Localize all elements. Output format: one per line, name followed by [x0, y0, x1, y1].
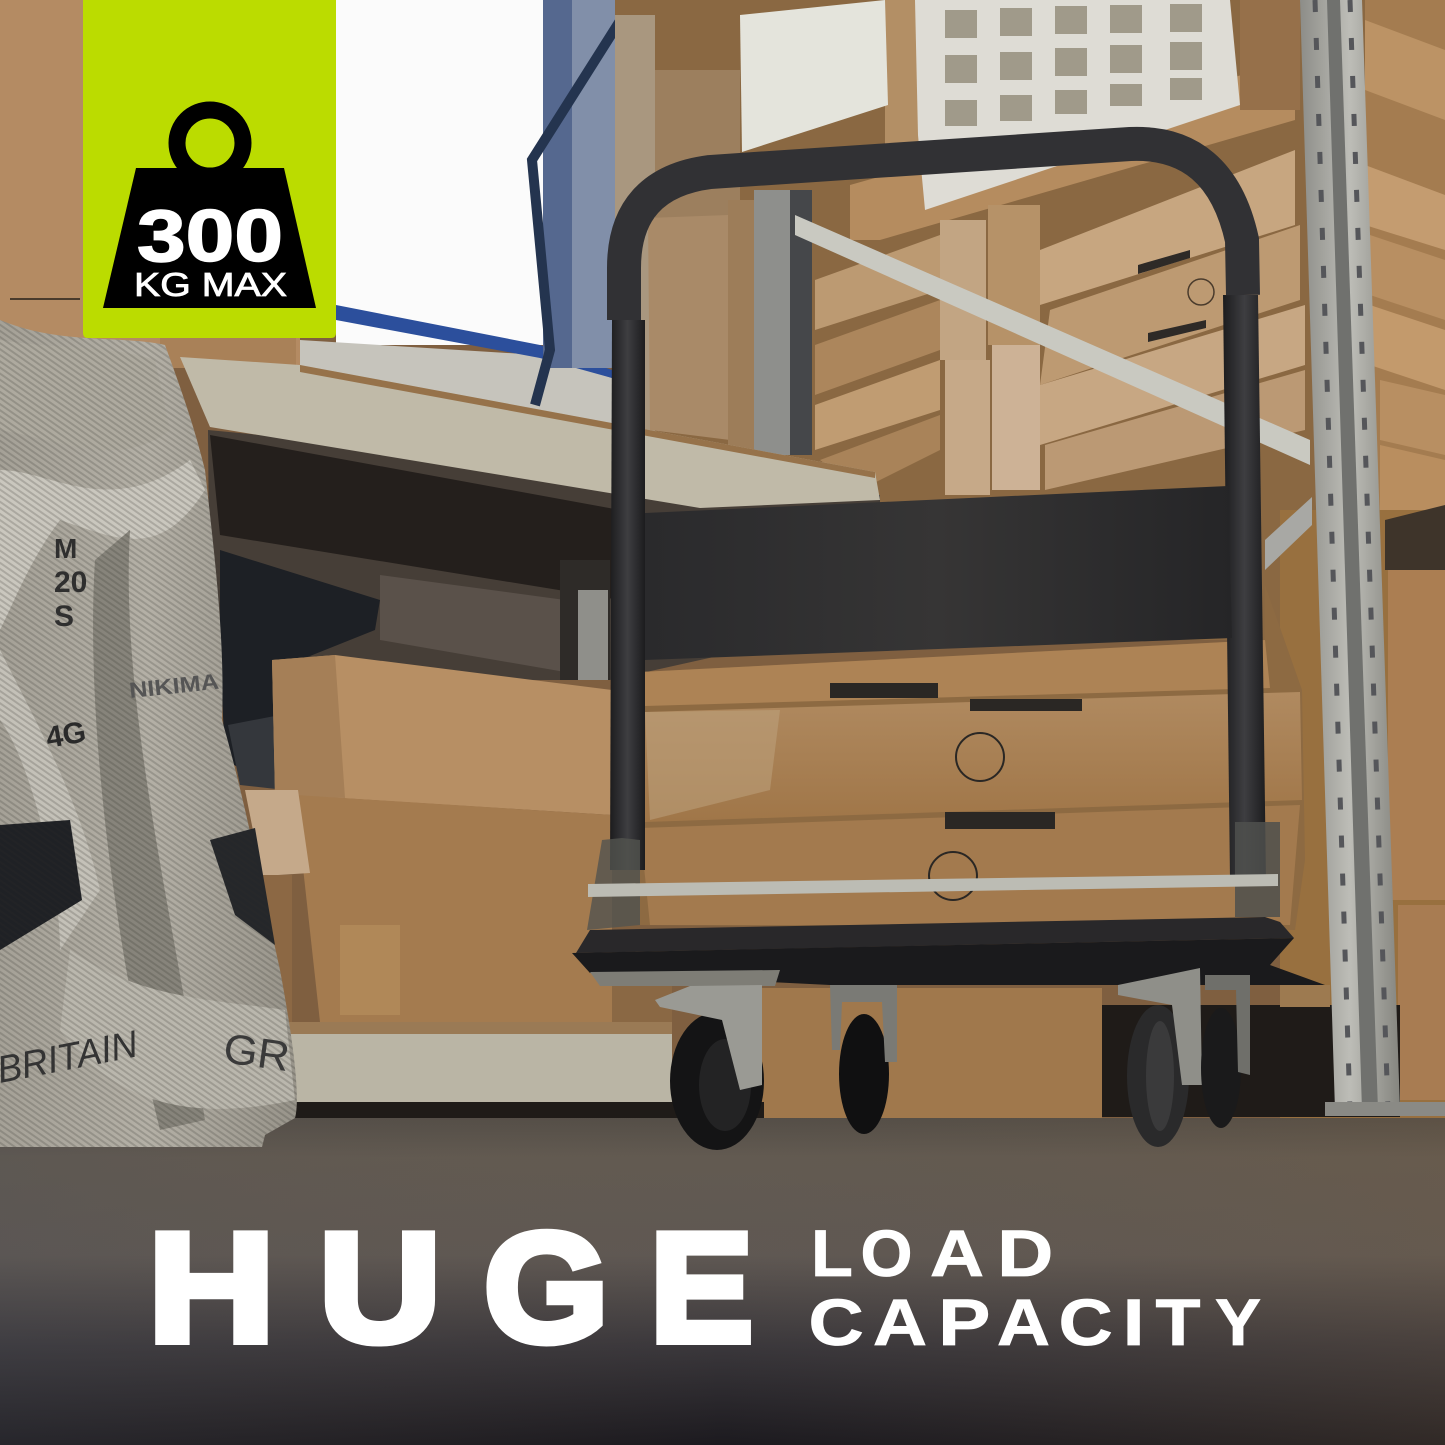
heading: capacity: T — [1156, 1285, 1200, 1359]
heading: load: D — [997, 1216, 1053, 1290]
heading: capacity: I — [1123, 1285, 1145, 1359]
heading: load: A — [930, 1216, 984, 1290]
trolley load: three cardboard boxes — [640, 585, 1305, 930]
capacity unit: KG MAX — [134, 266, 287, 303]
capacity number: 300 — [137, 196, 283, 277]
heading: capacity: Y — [1215, 1285, 1261, 1359]
heading: capacity: C — [808, 1285, 864, 1359]
heading: huge: E — [650, 1201, 753, 1374]
heading: huge: H — [148, 1201, 275, 1374]
heading: huge: G — [484, 1201, 608, 1374]
trolley deck and hinge bar — [572, 822, 1325, 986]
heading: capacity — [808, 1285, 1261, 1359]
trolley back panel — [645, 486, 1232, 660]
woven sack: 20 — [54, 566, 87, 599]
top poster sheets — [740, 0, 1240, 210]
black plastic bags — [220, 550, 380, 790]
badge background — [83, 0, 336, 338]
woven sack: M — [54, 533, 77, 564]
woven sack — [0, 320, 297, 1147]
heading: capacity: C — [1059, 1285, 1113, 1359]
trolley casters and wheels — [655, 968, 1250, 1150]
lower shelf beam — [282, 1022, 764, 1126]
heading: capacity: A — [997, 1285, 1050, 1359]
heading: capacity: A — [873, 1285, 927, 1359]
heading: load: L — [811, 1216, 853, 1290]
icon: weight — [103, 110, 316, 308]
badge: weight capacity — [83, 0, 336, 338]
cardboard boxes under shelf — [245, 655, 672, 1025]
heading: huge — [148, 1201, 753, 1374]
woven sack: GR — [221, 1024, 293, 1080]
floor — [0, 1118, 1445, 1445]
bright window — [336, 0, 548, 345]
heading: load — [811, 1216, 1053, 1290]
woven sack: 4G — [43, 715, 89, 755]
metal upright and diagonal brace — [754, 0, 1445, 1116]
woven sack: S — [54, 600, 74, 633]
top-left cardboard box — [0, 0, 300, 368]
warehouse racking with stacked boxes — [615, 0, 1445, 1120]
upper shelf beam and dark shelf void — [180, 357, 880, 680]
truck door and blue frame — [300, 0, 630, 425]
woven sack: NIKIMA — [128, 669, 220, 703]
heading: load: O — [860, 1216, 912, 1290]
heading: huge: U — [319, 1201, 441, 1374]
heading: capacity: P — [938, 1285, 990, 1359]
trolley handle — [610, 144, 1266, 880]
